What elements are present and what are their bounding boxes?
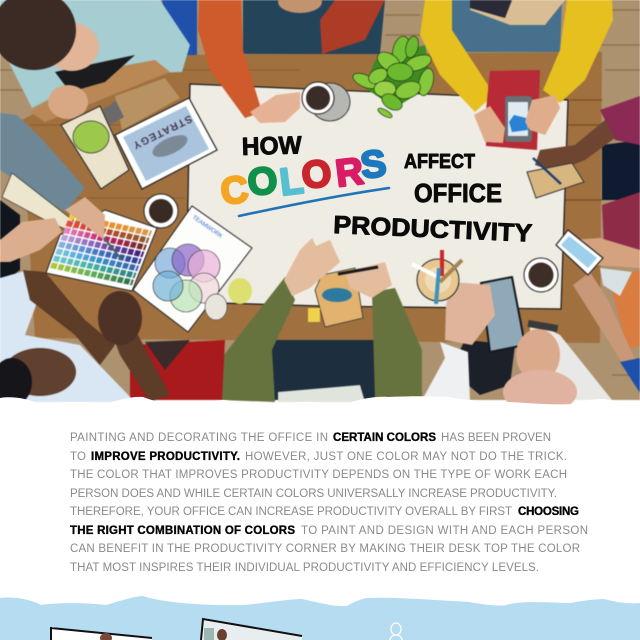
photo frame left [51,627,152,640]
wooden floor [0,0,640,400]
paper stack with apple [61,78,180,189]
person: white shirt lower right [422,277,612,414]
photo: team around the table [0,0,640,414]
paragraph: TO [70,451,86,463]
person: olive sweater lower centre [220,238,422,402]
paragraph: PERSON DOES AND WHILE CERTAIN COLORS UNIVERSALLY INCREASE PRODUCTIVITY. [70,488,557,500]
white wavy panel [0,396,640,600]
paragraph: TO PAINT AND DESIGN WITH AND EACH PERSON [301,525,588,537]
panel: blue section [0,596,640,640]
blue wavy band [0,596,640,640]
plant [351,34,436,120]
paragraph: CHOOSING [518,506,579,518]
heading word: affect: AFFECT [404,151,475,173]
underline [239,188,389,216]
person: blue shirt lower left [0,270,225,406]
person: teal shirt top left [0,0,197,122]
paragraph: THE RIGHT COMBINATION OF COLORS [70,525,295,537]
venn diagram paper: TEAMWORK [191,215,223,240]
venn diagram paper [133,206,252,332]
photo frame right [200,619,302,640]
person: plaid shirt right [535,96,640,250]
paragraph: PAINTING AND DECORATING THE OFFICE IN [70,432,328,444]
heading word: colors: L [277,160,306,204]
title [218,131,533,248]
coffee and saucer top [302,82,350,121]
tablet: strategy: STRATEGY [131,112,194,151]
paragraph: CAN BENEFIT IN THE PRODUCTIVITY CORNER BY MAKING THEIR DESK TOP THE COLOR [70,543,580,555]
heading word: how: HOW [241,131,303,161]
tan note with cloud [308,268,363,327]
coffee cup lower right [524,258,558,292]
icon: person outline [390,623,402,640]
notepad and pen [527,158,584,198]
paragraph: THEREFORE, YOUR OFFICE CAN INCREASE PRODUCTIVITY OVERALL BY FIRST [70,506,512,518]
heading word: colors: O [299,152,334,198]
colour swatch chart [46,210,157,291]
paragraph: HAS BEEN PROVEN [441,432,551,444]
red notebook with phone [474,70,560,150]
person: hands and phone lower right [556,230,640,393]
paragraph: IMPROVE PRODUCTIVITY. [91,451,240,463]
coffee cup left [144,194,178,228]
tablet: strategy [115,98,217,189]
paragraph: HOWEVER, JUST ONE COLOR MAY NOT DO THE TRICK. [245,451,567,463]
paragraph: THE COLOR THAT IMPROVES PRODUCTIVITY DEPENDS ON THE TYPE OF WORK EACH [70,469,567,481]
hands over swatches [0,197,122,262]
heading word: colors: O [245,159,280,205]
person: orange sleeves top centre [198,0,385,123]
heading word: productivity: PRODUCTIVITY [333,211,533,248]
paragraph: THAT MOST INSPIRES THEIR INDIVIDUAL PRODUCTIVITY AND EFFICIENCY LEVELS. [70,562,539,574]
heading word: colors: C [218,169,251,214]
heading word: office: OFFICE [414,178,502,208]
paragraph: CERTAIN COLORS [333,432,436,444]
person: grey jacket left [0,113,93,285]
heading word: colors: S [358,143,389,187]
person: yellow sweater top right [420,0,613,112]
panel: intro text [0,396,640,600]
crumpled paper balls [205,278,252,320]
poster sheet [186,84,568,309]
heading word: colors [218,143,389,214]
heading word: colors: R [333,151,366,196]
table top [22,52,602,343]
paragraph [70,432,588,574]
pencil holder [412,250,462,304]
